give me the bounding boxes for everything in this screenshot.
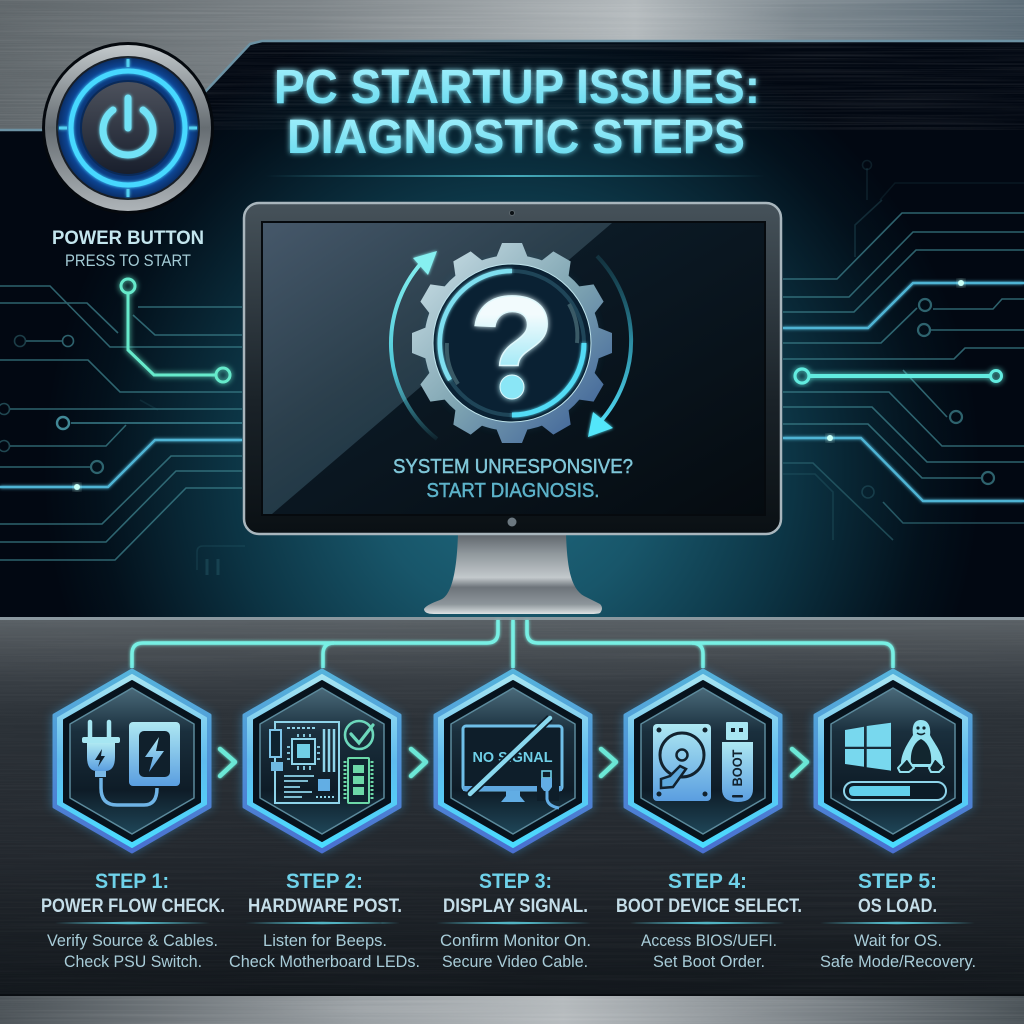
step 1 text (41, 870, 225, 971)
arrow: step 3 to 4 (601, 749, 616, 776)
icon: power symbol (103, 98, 153, 155)
brushed metal bottom strip (0, 994, 1024, 1024)
step 1 text: Verify Source & Cables. (47, 931, 218, 950)
step 1 text: POWER FLOW CHECK. (41, 896, 225, 917)
icon: linux penguin (898, 720, 944, 772)
screen glare (263, 223, 612, 514)
step 5 text: OS LOAD. (858, 896, 937, 917)
step 3 text: DISPLAY SIGNAL. (443, 896, 588, 917)
right bright blue traces (783, 280, 1024, 501)
icon: monitor with no signal (463, 718, 562, 808)
icon: motherboard (270, 721, 373, 803)
gear (410, 241, 614, 445)
icon: power plug and PSU (82, 722, 180, 805)
arrow: step 4 to 5 (792, 749, 807, 776)
icon: RAM stick (348, 758, 369, 803)
connector lines from monitor to steps (132, 620, 893, 668)
step 2 text (229, 870, 420, 971)
step 2 text: Listen for Beeps. (263, 931, 387, 950)
icon: windows logo (845, 723, 891, 771)
diagnostic gear with question mark (410, 241, 614, 445)
glowing ring (71, 71, 185, 185)
step 2 text: Check Motherboard LEDs. (229, 952, 420, 971)
step 4 text: Access BIOS/UEFI. (641, 931, 777, 950)
power button label: PRESS TO START (65, 251, 191, 270)
power button (42, 42, 214, 214)
step 4 text (616, 870, 802, 971)
title underline (265, 175, 765, 177)
icon: progress bar (844, 782, 946, 800)
step 4 hexagon badge (623, 669, 783, 853)
screen (262, 222, 765, 515)
arrow: step 2 to 3 (411, 749, 426, 776)
step 3 text: Secure Video Cable. (442, 952, 588, 971)
step 3 text: STEP 3: (479, 870, 552, 893)
monitor message (393, 455, 633, 502)
title (274, 61, 760, 164)
right circuit traces (783, 160, 1024, 540)
lower steps panel (0, 617, 1024, 995)
icon: check mark (345, 721, 373, 749)
left circuit traces (0, 286, 245, 575)
power button label (52, 228, 204, 270)
monitor message: START DIAGNOSIS. (426, 479, 600, 502)
question mark: ? (469, 267, 555, 426)
title: PC STARTUP ISSUES: (274, 61, 760, 114)
arrow: left circular arrow (391, 251, 437, 439)
monitor (244, 203, 781, 534)
step 4 text: Set Boot Order. (653, 952, 765, 971)
icon: monitor with no signal: NO SIGNAL (472, 749, 552, 766)
arrow: step 1 to 2 (220, 749, 235, 776)
step 2 text: STEP 2: (286, 870, 363, 893)
monitor message: SYSTEM UNRESPONSIVE? (393, 455, 633, 478)
step 5 text (820, 870, 976, 971)
step 4 text: STEP 4: (668, 870, 747, 893)
ring tick marks (59, 59, 197, 197)
step 3 hexagon badge (433, 669, 593, 853)
right highlighted connector (795, 369, 1002, 383)
step 3 text: Confirm Monitor On. (440, 931, 591, 950)
question mark (470, 290, 552, 404)
step 5 text: Safe Mode/Recovery. (820, 952, 976, 971)
step 2 hexagon badge (242, 669, 402, 853)
arrow: right circular arrow (588, 256, 631, 437)
power button label: POWER BUTTON (52, 228, 204, 249)
step 5 text: Wait for OS. (854, 931, 942, 950)
step 3 text (436, 870, 591, 971)
step 2 text: HARDWARE POST. (248, 896, 402, 917)
step 1 text: Check PSU Switch. (64, 952, 202, 971)
icon: USB boot drive: BOOT (729, 749, 745, 786)
title: DIAGNOSTIC STEPS (287, 111, 745, 164)
left highlighted connector (121, 279, 230, 382)
icon: USB boot drive (722, 722, 753, 802)
step 1 hexagon badge (52, 669, 212, 853)
step 4 text: BOOT DEVICE SELECT. (616, 896, 802, 917)
brushed metal top frame (0, 0, 1024, 130)
icon: hard drive (653, 724, 711, 801)
monitor stand (424, 533, 602, 614)
step 5 text: STEP 5: (858, 870, 937, 893)
step 5 hexagon badge (813, 669, 973, 853)
left bright blue trace (0, 440, 242, 490)
step 1 text: STEP 1: (95, 870, 169, 893)
